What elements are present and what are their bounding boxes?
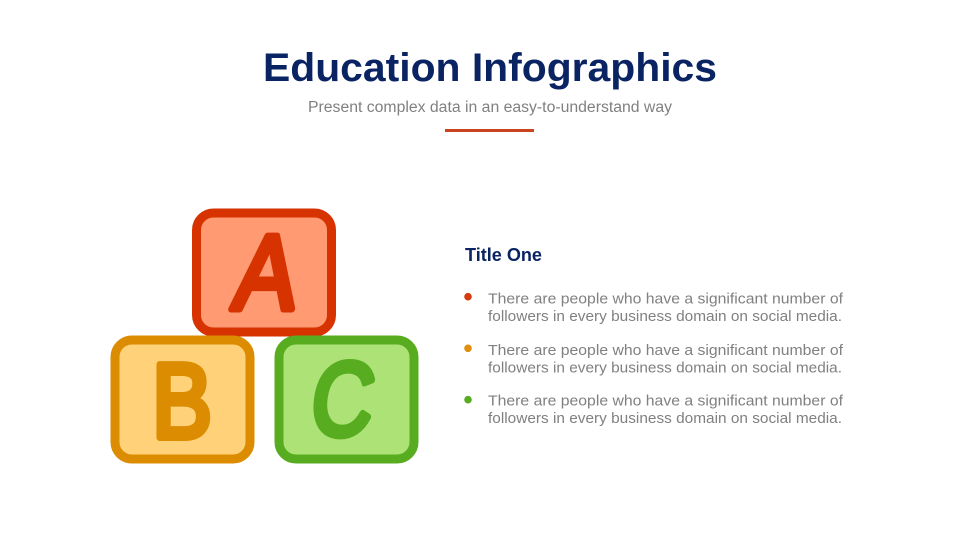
subtitle: Present complex data in an easy-to-understand way xyxy=(308,99,672,116)
bullet item 1: followers in every business domain on social media. xyxy=(488,308,842,325)
icon: ABC blocks xyxy=(115,213,414,460)
panel heading: Title One xyxy=(465,244,542,265)
bullet item 3: There are people who have a significant number of xyxy=(488,393,844,410)
bullet item 1: There are people who have a significant number of xyxy=(488,290,844,308)
block B xyxy=(115,340,250,460)
bullet item 2: There are people who have a significant number of xyxy=(488,342,844,359)
bullet item 2 xyxy=(464,342,844,376)
title underline xyxy=(445,129,534,132)
block A xyxy=(196,213,332,332)
bullet item 1 xyxy=(464,290,844,325)
block A: A xyxy=(228,214,306,332)
title: Education Infographics xyxy=(263,46,717,90)
block B: B xyxy=(152,342,212,460)
block C: C xyxy=(305,342,381,458)
bullet item 3 xyxy=(464,393,844,427)
block C xyxy=(279,340,414,459)
bullet item 3: followers in every business domain on social media. xyxy=(488,410,842,427)
bullet item 2: followers in every business domain on social media. xyxy=(488,359,842,376)
